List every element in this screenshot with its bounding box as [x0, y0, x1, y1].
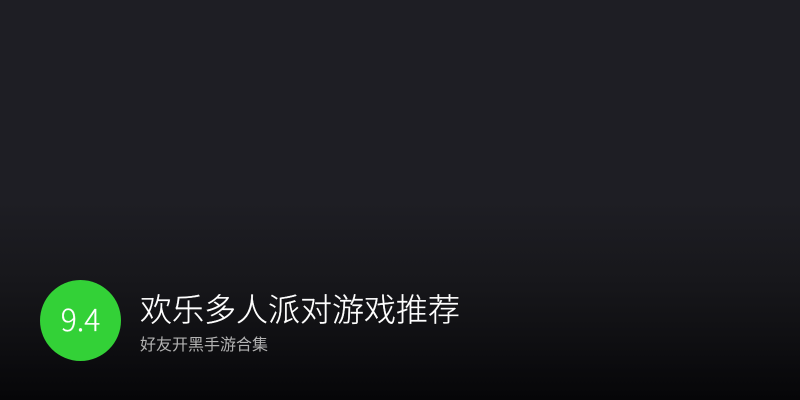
score badge: green circle with rating	[40, 280, 121, 361]
title: 欢乐多人派对游戏推荐	[140, 292, 460, 328]
subtitle: 好友开黑手游合集	[140, 337, 268, 354]
score badge: green circle with rating: 9.4	[61, 296, 100, 340]
